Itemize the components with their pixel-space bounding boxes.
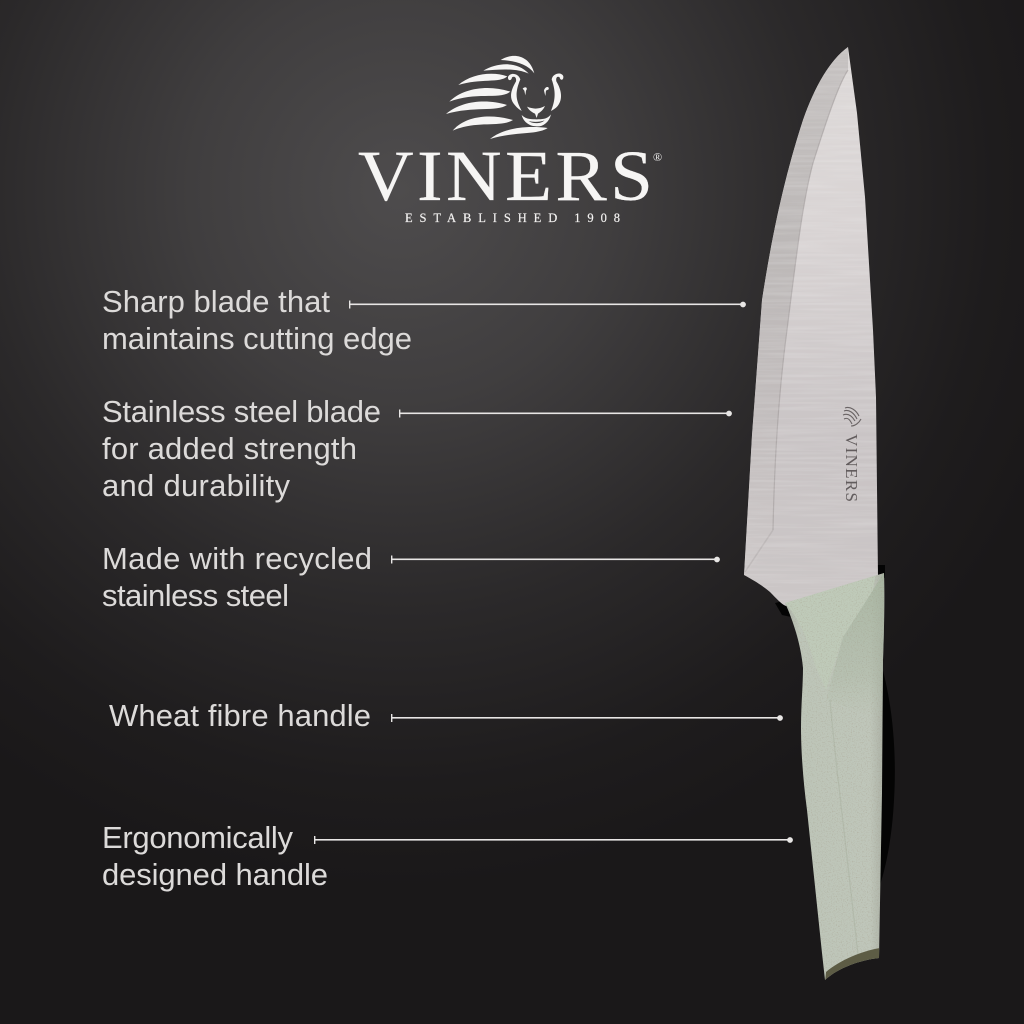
feature: sharp blade: Sharp blade that <box>102 284 330 319</box>
registered mark: ® <box>653 150 662 164</box>
feature: ergonomic handle: designed handle <box>102 857 328 892</box>
feature: recycled steel: stainless steel <box>102 578 289 613</box>
leader line: recycled steel <box>391 556 720 564</box>
engraved wordmark: VINERS <box>842 434 861 502</box>
engraved blade logo <box>842 407 861 502</box>
leader line: wheat fibre <box>391 714 783 722</box>
leader line: ergonomic <box>314 836 793 844</box>
feature: stainless steel: and durability <box>102 468 290 503</box>
icon: lion head <box>446 56 563 139</box>
feature: recycled steel <box>102 541 372 613</box>
feature: stainless steel: Stainless steel blade <box>102 394 381 429</box>
handle <box>785 573 884 980</box>
feature: ergonomic handle <box>102 820 328 892</box>
tagline: ESTABLISHED 1908 <box>405 211 620 225</box>
feature: wheat fibre handle: Wheat fibre handle <box>109 698 371 733</box>
feature: stainless steel: for added strength <box>102 431 357 466</box>
feature: ergonomic handle: Ergonomically <box>102 820 294 855</box>
leader line: stainless steel <box>399 410 732 418</box>
blade <box>740 40 880 610</box>
feature: sharp blade <box>102 284 412 356</box>
feature: recycled steel: Made with recycled <box>102 541 372 576</box>
Viners logo <box>358 56 662 225</box>
engraved lion mark <box>843 407 861 426</box>
feature: sharp blade: maintains cutting edge <box>102 321 412 356</box>
knife <box>740 40 895 985</box>
leader line: sharp blade <box>349 300 746 308</box>
feature: stainless steel <box>102 394 381 503</box>
handle shadow <box>775 565 895 885</box>
wordmark: VINERS <box>358 137 653 216</box>
